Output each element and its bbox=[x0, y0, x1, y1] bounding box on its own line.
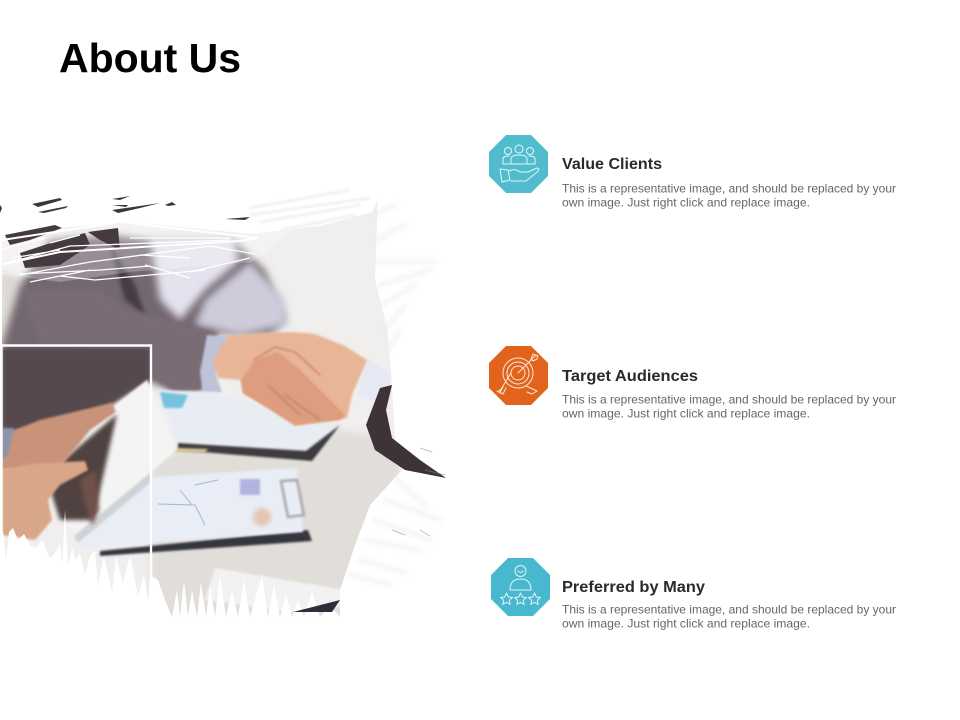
title: About Us bbox=[59, 35, 241, 81]
description: This is a representative image, and should be replaced by your bbox=[562, 602, 896, 616]
handshake bbox=[213, 332, 367, 426]
description bbox=[562, 182, 896, 210]
table surface bbox=[150, 430, 400, 620]
icon: person with three stars bbox=[491, 558, 550, 616]
tablet bbox=[114, 379, 178, 474]
heading: Preferred by Many bbox=[562, 579, 705, 596]
document with blue chart bbox=[158, 390, 340, 450]
clipboard with charts bbox=[100, 530, 312, 556]
item: target audiences bbox=[489, 346, 896, 420]
item: value clients bbox=[489, 135, 896, 210]
hands with tablet bbox=[2, 403, 116, 540]
heading: Value Clients bbox=[562, 156, 662, 173]
dark flecks right of sleeve bbox=[392, 448, 445, 536]
description: This is a representative image, and should be replaced by your bbox=[562, 392, 896, 406]
clip bbox=[281, 480, 304, 517]
white frame over photo bbox=[2, 346, 151, 595]
description: own image. Just right click and replace image. bbox=[562, 406, 810, 420]
photo: business handshake with brushed edges bbox=[0, 180, 450, 622]
heading: Target Audiences bbox=[562, 368, 698, 385]
brush: top streaks bbox=[0, 180, 450, 282]
shirt cuff bbox=[200, 335, 228, 395]
description bbox=[562, 602, 896, 630]
brush: bottom edge bbox=[0, 510, 340, 622]
description: own image. Just right click and replace image. bbox=[562, 196, 810, 210]
description: This is a representative image, and should be replaced by your bbox=[562, 182, 896, 196]
dark sleeve bbox=[366, 385, 446, 478]
foreground blurred sheet bbox=[205, 568, 345, 612]
item: preferred by many bbox=[491, 558, 896, 630]
icon: people in hand bbox=[489, 135, 548, 193]
description: own image. Just right click and replace image. bbox=[562, 616, 810, 630]
brush: right faint wisps bbox=[350, 205, 440, 585]
icon: target with arrows bbox=[489, 346, 548, 405]
suit jacket bbox=[2, 235, 285, 432]
description bbox=[562, 392, 896, 420]
